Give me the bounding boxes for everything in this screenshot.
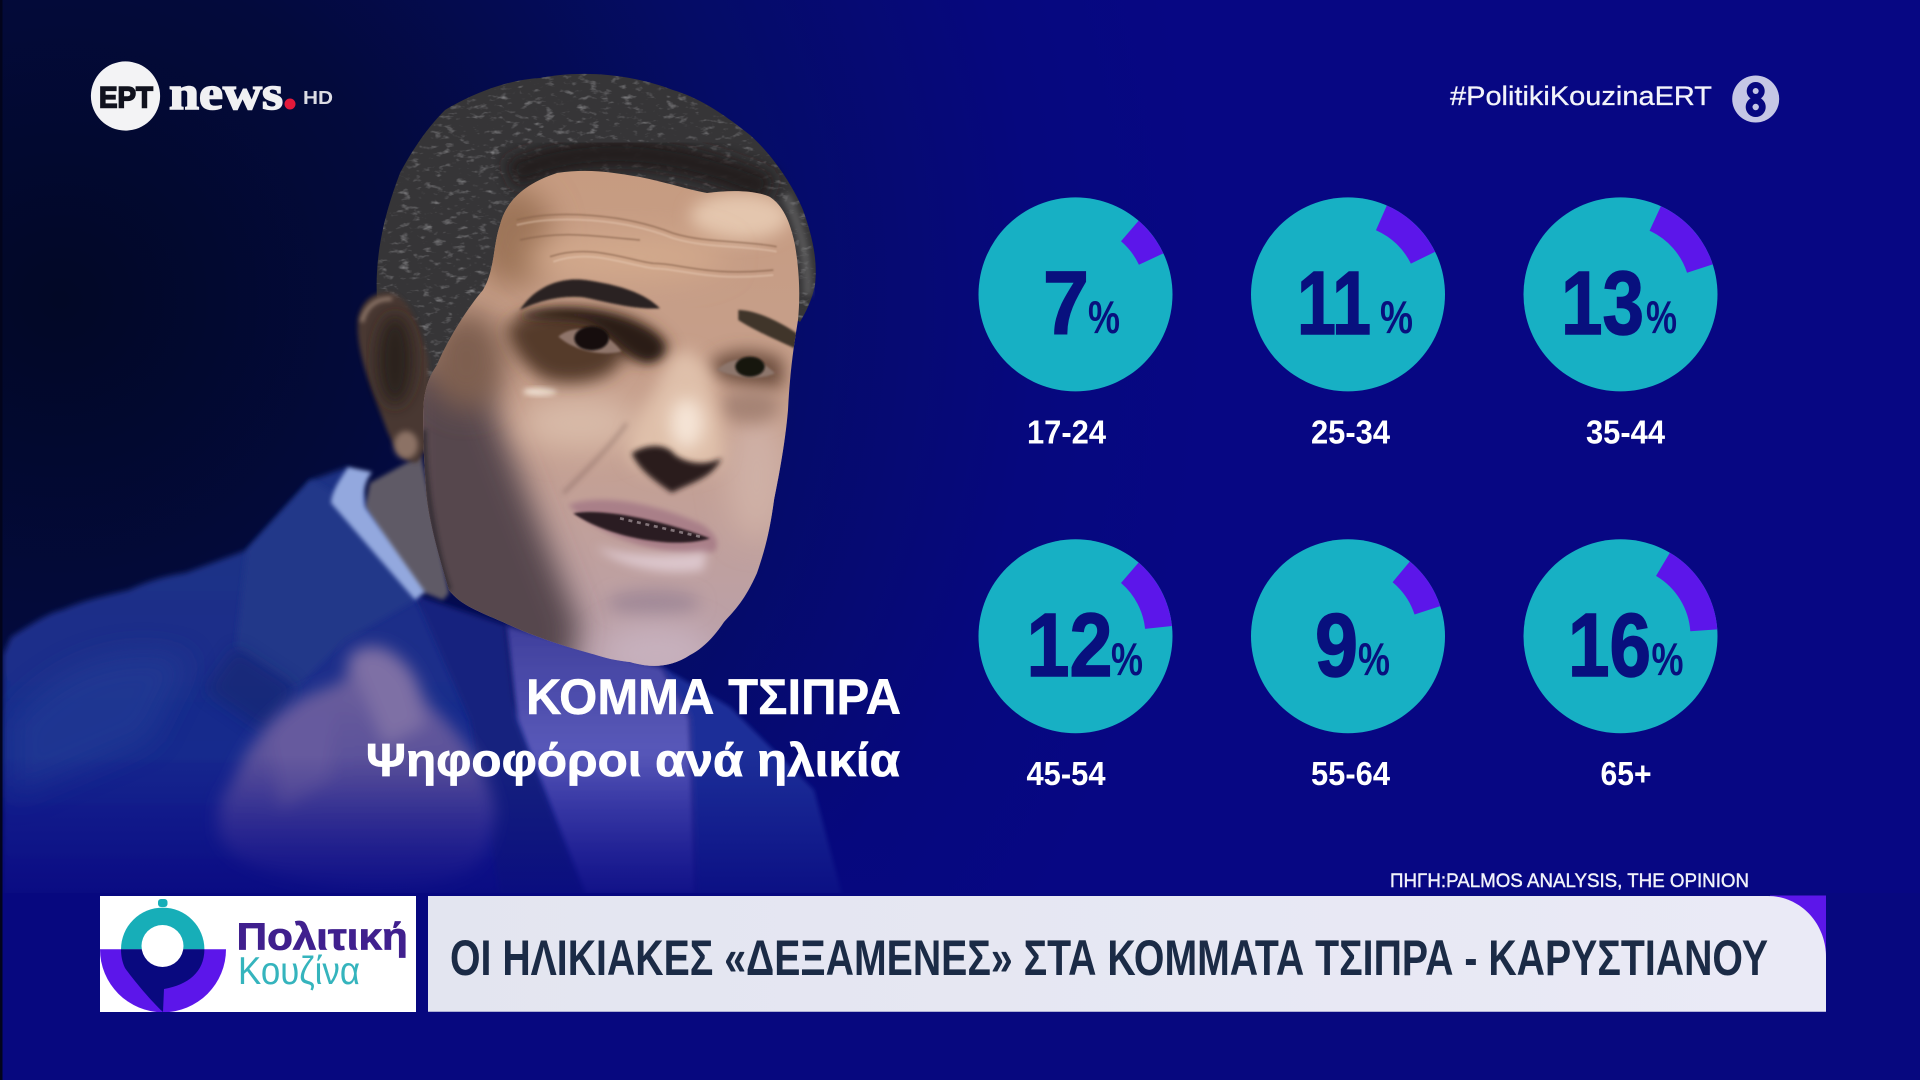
face <box>423 170 800 666</box>
subheading: voters by age: Ψηφοφόροι ανά ηλικία <box>366 734 900 786</box>
logo circle <box>91 61 160 131</box>
panel: programme logo <box>100 896 416 1012</box>
logo ERT letters: ΕΡΤ <box>99 82 153 115</box>
icon: Politiki Kouzina mark <box>100 899 226 1012</box>
lapel shadow <box>205 647 297 735</box>
ear <box>358 292 432 462</box>
chart: age 45-54: % <box>1111 633 1143 685</box>
nose <box>628 352 724 476</box>
chart: age 65+: % <box>1652 633 1684 685</box>
logo: ERT news HD <box>91 61 333 131</box>
source note: ΠΗΓΗ:PALMOS ANALYSIS, THE OPINION <box>1390 871 1749 892</box>
mouth <box>568 500 717 553</box>
bottom strip <box>0 893 1920 1080</box>
photo: politician portrait <box>0 74 900 895</box>
chart: age 55-64: 9 <box>1315 596 1358 696</box>
chart: age 35-44: 35-44 <box>1586 414 1666 450</box>
jaw shadow <box>424 430 449 590</box>
icon: channel 8 <box>1732 76 1779 122</box>
chart: age 65+ <box>1506 522 1735 792</box>
chart: age 45-54: 12 <box>1026 596 1112 696</box>
shirt collar <box>331 467 425 600</box>
hair <box>377 74 816 400</box>
hand <box>218 646 495 889</box>
left eyebrow <box>520 279 660 310</box>
facial shading <box>423 360 596 654</box>
hashtag: #PolitikiKouzinaERT <box>1450 81 1712 111</box>
chart: age 45-54: 45-54 <box>1026 755 1106 792</box>
chart: age 17-24 <box>958 177 1193 450</box>
chart: age 17-24: 7 <box>1043 254 1089 354</box>
chart: age 65+: 65+ <box>1600 755 1652 792</box>
left edge line <box>0 0 2 1080</box>
chart: age 55-64: % <box>1358 633 1390 685</box>
sleeve folds <box>10 652 190 800</box>
suit jacket <box>3 467 584 895</box>
inner lapel <box>415 595 584 895</box>
chart: age 35-44 <box>1510 183 1731 450</box>
chart: age 17-24: % <box>1088 291 1120 343</box>
right eyebrow <box>738 310 802 350</box>
logo red dot <box>284 98 296 110</box>
right eye <box>717 359 775 378</box>
chart: age 65+: 16 <box>1568 596 1651 696</box>
eye sockets <box>507 309 670 383</box>
logo HD: HD <box>303 88 333 108</box>
heading: party name: ΚΟΜΜΑ ΤΣΙΠΡΑ <box>526 669 901 725</box>
left eye <box>558 329 622 353</box>
chart: age 25-34: 25-34 <box>1311 414 1391 450</box>
chart: age 35-44: % <box>1646 291 1677 343</box>
purple corner accent <box>1770 896 1826 958</box>
chart: age 45-54 <box>958 518 1193 792</box>
logo text: Kouzina: Κουζίνα <box>238 950 360 993</box>
bottom fade <box>0 755 900 895</box>
chart: age 25-34: % <box>1380 291 1413 343</box>
neck <box>365 455 449 600</box>
nasolabial crease <box>563 423 627 493</box>
nostrils <box>632 446 722 493</box>
chart: age 55-64 <box>1230 519 1466 792</box>
chart: age 25-34 <box>1238 184 1458 450</box>
chart: age 25-34: 11 <box>1297 254 1371 354</box>
bar <box>428 896 1826 1012</box>
shirt <box>505 625 696 895</box>
chart: age 35-44: 13 <box>1561 254 1644 354</box>
suit right side <box>662 667 842 895</box>
logo news word: news <box>169 67 283 120</box>
lapel <box>236 480 415 687</box>
chart: age 17-24: 17-24 <box>1027 414 1107 450</box>
chart: age 55-64: 55-64 <box>1311 755 1391 792</box>
forehead wrinkles <box>517 215 777 272</box>
logo text: Politiki: Πολιτική <box>237 916 408 958</box>
panel: headline bar <box>428 896 1826 1012</box>
chin <box>600 625 713 682</box>
